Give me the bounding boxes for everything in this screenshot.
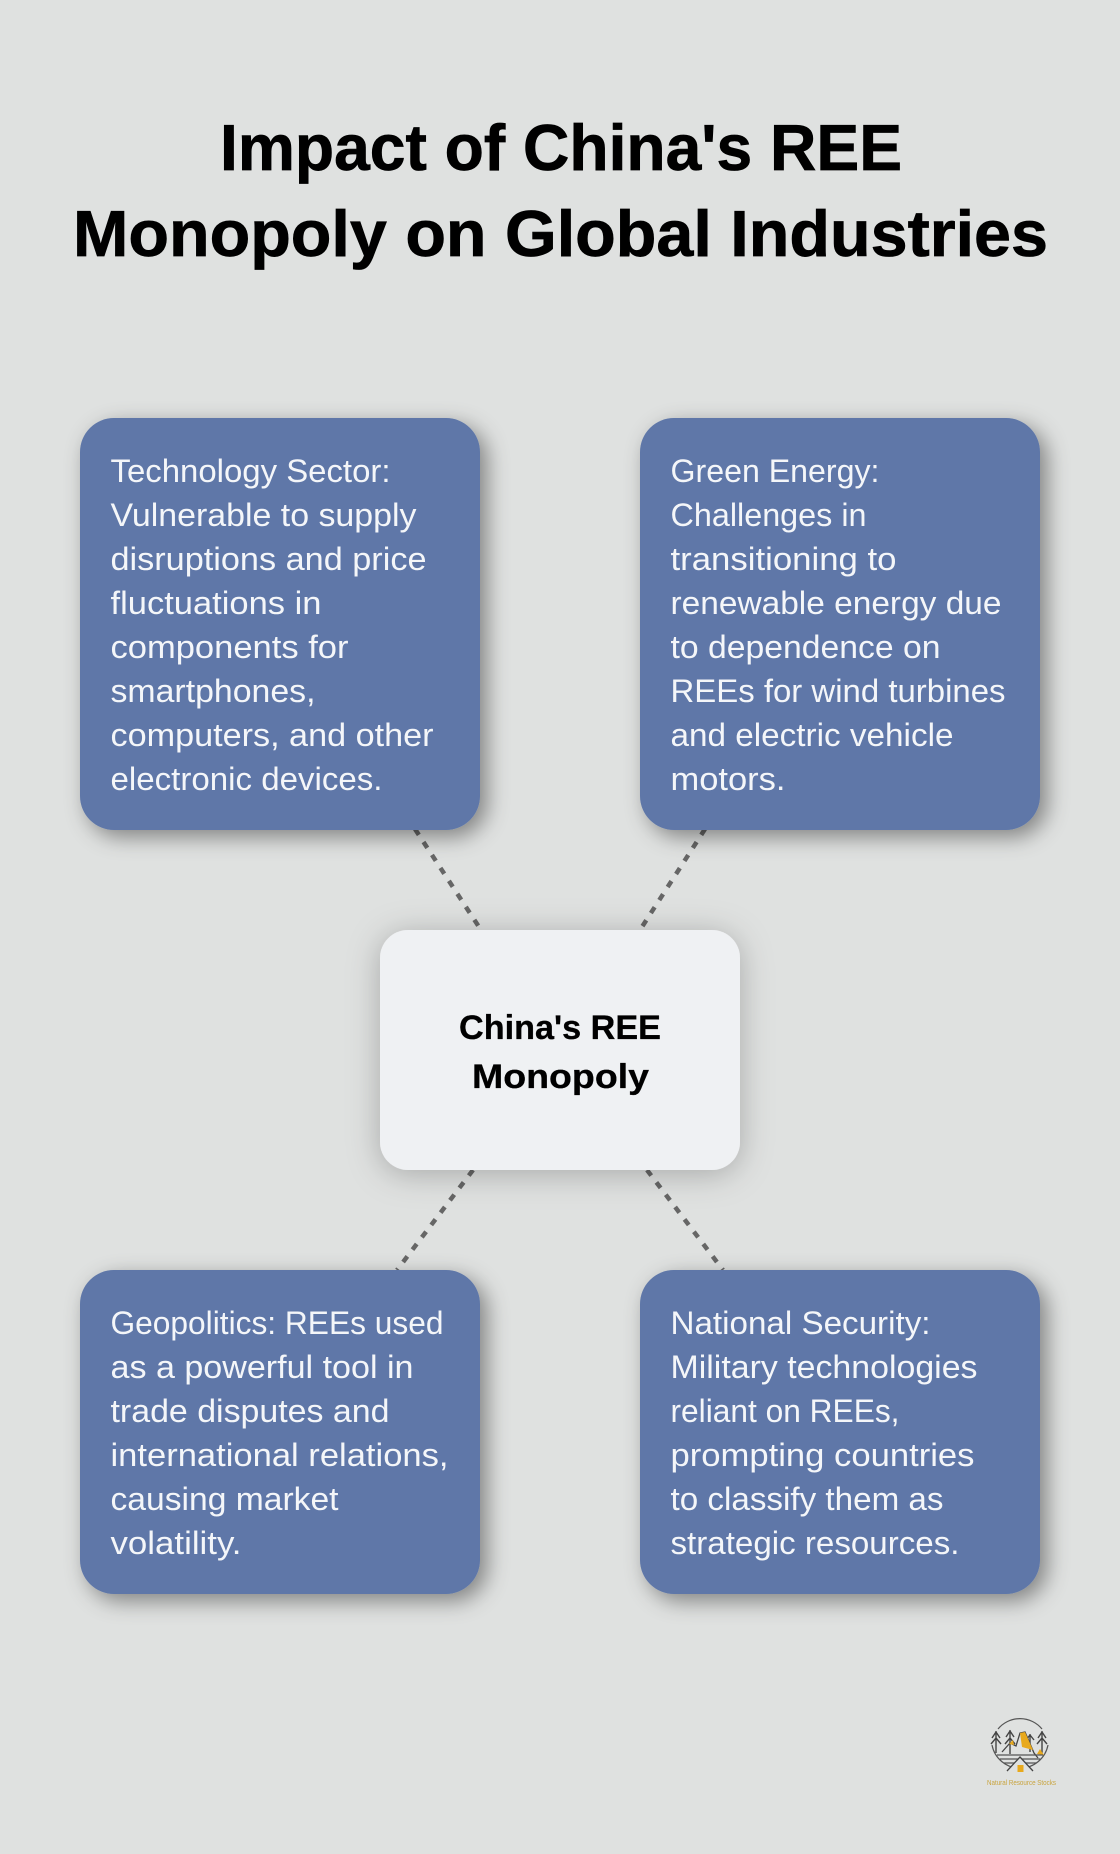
panel: geopolitics: international relations, <box>110 1437 449 1473</box>
icon: natural resource stocks logo <box>987 1719 1056 1787</box>
panel: technology sector: electronic devices. <box>110 761 382 797</box>
panel: national security <box>640 1270 1040 1594</box>
panel: technology sector: Vulnerable to supply <box>110 497 417 533</box>
panel: green energy: to dependence on <box>670 629 940 665</box>
panel: green energy: motors. <box>670 761 786 797</box>
panel: green energy: transitioning to <box>670 541 896 577</box>
panel: green energy: REEs for wind turbines <box>670 673 1006 709</box>
title <box>73 111 1048 270</box>
panel: national security: strategic resources. <box>670 1525 960 1561</box>
panel: geopolitics <box>80 1270 480 1594</box>
panel: technology sector: disruptions and price <box>110 541 427 577</box>
panel: technology sector: fluctuations in <box>110 585 322 621</box>
panel: green energy: Challenges in <box>670 497 866 533</box>
panel: centre node: China's REE <box>459 1009 661 1047</box>
panel: national security: Military technologies <box>670 1349 978 1385</box>
panel: green energy: and electric vehicle <box>670 717 954 753</box>
dashed connector: geopolitics to centre <box>397 1170 473 1270</box>
panel: technology sector: computers, and other <box>110 717 434 753</box>
icon: natural resource stocks logo: Natural Resource Stocks <box>987 1778 1056 1787</box>
panel: national security: prompting countries <box>670 1437 974 1473</box>
panel: geopolitics: causing market <box>110 1481 338 1517</box>
panel: geopolitics: trade disputes and <box>110 1393 390 1429</box>
panel: national security: to classify them as <box>670 1481 944 1517</box>
title: Impact of China's REE <box>220 111 902 184</box>
panel: green energy: renewable energy due <box>670 585 1002 621</box>
dashed connector: national security to centre <box>647 1170 723 1270</box>
panel: technology sector: Technology Sector: <box>110 453 390 489</box>
panel: technology sector <box>80 418 480 830</box>
panel: technology sector: smartphones, <box>110 673 316 709</box>
panel: national security: National Security: <box>670 1305 930 1341</box>
dashed connector: green energy to centre <box>640 829 705 930</box>
dashed connector: technology sector to centre <box>415 829 481 930</box>
panel: centre node <box>380 930 740 1170</box>
panel: geopolitics: volatility. <box>110 1525 242 1561</box>
title: Monopoly on Global Industries <box>73 197 1048 270</box>
panel: green energy <box>640 418 1040 830</box>
panel: centre node: Monopoly <box>472 1058 649 1096</box>
panel: green energy: Green Energy: <box>670 453 880 489</box>
panel: national security: reliant on REEs, <box>670 1393 900 1429</box>
panel: geopolitics: Geopolitics: REEs used <box>110 1305 444 1341</box>
panel: technology sector: components for <box>110 629 349 665</box>
panel: geopolitics: as a powerful tool in <box>110 1349 414 1385</box>
